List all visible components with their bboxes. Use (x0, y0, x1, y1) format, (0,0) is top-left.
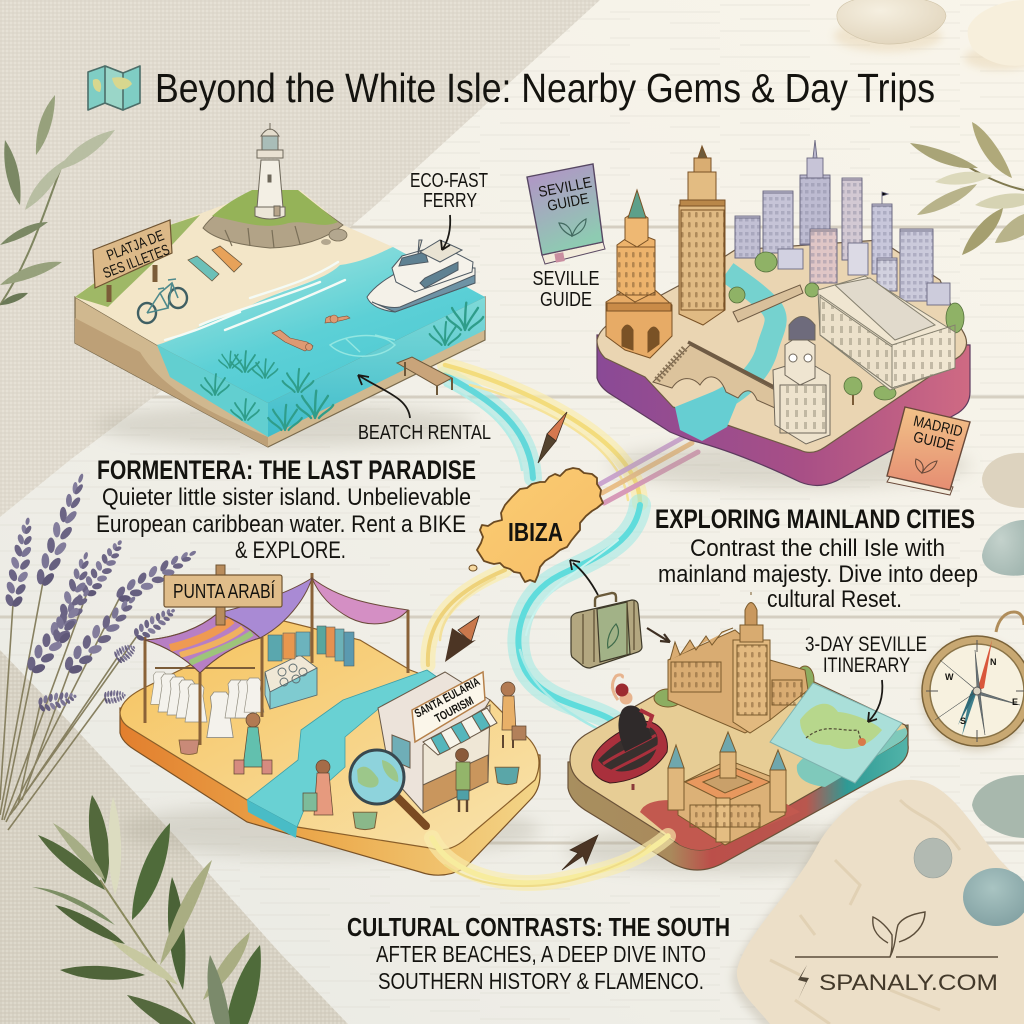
arrow: compass needle to market (445, 616, 479, 662)
Royal palace (818, 276, 955, 390)
arrow: ferry label (441, 215, 450, 250)
seaweed (201, 303, 483, 430)
beach loungers (188, 246, 242, 281)
text block: Formentera: Quieter little sister island. Unbelievable (102, 484, 471, 511)
yellow route market to south (432, 836, 668, 886)
label: 3-day Seville itinerary: ITINERARY (823, 654, 910, 677)
hanging coloured clothes (268, 626, 354, 666)
label: Seville guide (532, 267, 600, 311)
book: Seville guide: GUIDE (546, 190, 590, 215)
label: Seville guide: GUIDE (540, 288, 592, 311)
panel: Andalusian south block (565, 592, 908, 874)
pier (397, 357, 452, 395)
logo: sprout and rule (795, 912, 998, 957)
text block: the south: CULTURAL CONTRASTS: THE SOUTH (347, 912, 730, 942)
route: yellow ribbon Formentera to Ibiza and south (445, 365, 640, 503)
clock tower (773, 316, 830, 444)
label: IBIZA: IBIZA (508, 517, 563, 547)
linen cloth bottom-left (0, 650, 348, 1024)
compass: E (1012, 697, 1018, 707)
arrow: suitcase to the south (647, 628, 670, 642)
jewellery stall (265, 655, 317, 709)
sign: Platja de Ses Illetes: PLATJA DE (104, 227, 166, 264)
water top surface (157, 247, 485, 403)
bicycle (138, 279, 187, 323)
shop: Santa Eulària tourism (378, 672, 497, 813)
olive branch top-left (0, 95, 115, 305)
label: eco-fast ferry (410, 170, 488, 212)
magnifying glass over map (350, 750, 426, 826)
text block: mainland cities: cultural Reset. (767, 586, 902, 613)
market people (234, 682, 526, 815)
plinth top (120, 620, 539, 850)
water cross-section left (157, 345, 268, 437)
suitcase (571, 593, 642, 668)
book: Madrid guide: MADRID (912, 413, 964, 441)
shop: Santa Eulària tourism: SANTA EULARIA (412, 674, 482, 721)
compass: S (960, 716, 966, 726)
text block: the south: AFTER BEACHES, A DEEP DIVE INTO (376, 941, 706, 967)
water cross-section right (268, 297, 485, 437)
panel: Formentera island block (75, 123, 485, 447)
plinth side (568, 725, 908, 870)
alcazar fortress (668, 732, 786, 845)
book: Madrid guide (887, 407, 970, 495)
text block: Formentera: & EXPLORE. (235, 537, 346, 564)
map: Ibiza island (469, 468, 603, 582)
compass (921, 612, 1024, 751)
text block: mainland cities: mainland majesty. Dive into deep (658, 561, 978, 588)
arrow: itinerary label (868, 680, 882, 722)
clothes rack white dresses (151, 668, 264, 738)
panel: market and Santa Eulària block (120, 565, 540, 875)
plinth top (570, 680, 908, 850)
lighthouse (255, 123, 285, 219)
plinth side (597, 335, 970, 485)
sand and grass top (75, 190, 393, 345)
sign: Punta Arabí (164, 565, 282, 625)
route: teal ribbon Ibiza to the south (518, 505, 640, 730)
panel: mainland Seville and Madrid block (597, 140, 970, 489)
olive branch bottom-left (32, 795, 261, 1024)
compass: N (990, 657, 996, 667)
text block: Formentera: European caribbean water. Rent a BIKE (96, 511, 466, 538)
arrow: compass needle to south (562, 835, 598, 870)
plinth side (120, 708, 540, 875)
text block: Formentera (96, 455, 476, 564)
soil side (75, 297, 485, 447)
label: Seville guide: SEVILLE (532, 267, 600, 290)
text block: mainland cities (655, 504, 978, 613)
cathedral (654, 592, 814, 733)
unfolded map (770, 683, 902, 783)
compass: W (945, 672, 954, 682)
ferry (367, 240, 475, 312)
book: Seville guide (527, 164, 605, 264)
arrow: compass needle to Formentera (538, 412, 567, 463)
route: yellow ribbon Ibiza to market (428, 570, 505, 665)
Giralda tower (679, 146, 725, 325)
canopy posts (145, 573, 408, 745)
book: Madrid guide: GUIDE (912, 429, 956, 455)
book: Seville guide: SEVILLE (537, 174, 593, 201)
arrow: beach rental label (358, 375, 410, 418)
sign: Platja de Ses Illetes (93, 220, 172, 302)
logo: SPANALY.COM: SPANALY.COM (819, 970, 998, 995)
text block: the south (347, 912, 730, 994)
plinth top (597, 240, 967, 452)
Gothic tower left (606, 190, 672, 358)
skyline (735, 140, 950, 305)
small footbridge (733, 285, 803, 322)
red and teal ground (640, 800, 800, 850)
flamenco dancer (592, 675, 667, 790)
pebbles top and right (834, 0, 1024, 576)
sign: Punta Arabí: PUNTA ARABÍ (173, 580, 275, 603)
sign: Platja de Ses Illetes: SES ILLETES (101, 241, 172, 282)
lavender sprigs (0, 470, 201, 830)
route: rainbow ribbon Ibiza to mainland (600, 437, 698, 503)
swimmers (272, 315, 350, 351)
woven baskets (179, 740, 519, 830)
label: beach rental: BEATCH RENTAL (358, 421, 491, 444)
linen cloth top-left (0, 0, 600, 517)
colourful canopies (145, 578, 408, 673)
olive branch top-right (910, 122, 1024, 255)
logo: bolt icon (798, 965, 809, 1000)
limestone slab with logo (732, 775, 1024, 1024)
text block: mainland cities: Contrast the chill Isle with (690, 535, 945, 562)
map icon (88, 66, 140, 110)
shop sign (412, 672, 485, 742)
cliff and grass (203, 194, 343, 248)
river (710, 272, 776, 405)
shop: Santa Eulària tourism: TOURISM (432, 693, 476, 726)
arrow: suitcase to Ibiza (570, 560, 598, 595)
label: 3-day Seville itinerary (805, 633, 927, 677)
label: eco-fast ferry: ECO-FAST (410, 170, 488, 192)
stone bridge (653, 342, 776, 408)
route: teal ribbon Formentera to Ibiza (445, 375, 533, 478)
label: 3-day Seville itinerary: 3-DAY SEVILLE (805, 633, 927, 656)
label: eco-fast ferry: FERRY (423, 190, 477, 212)
trees (729, 252, 964, 405)
text block: the south: SOUTHERN HISTORY & FLAMENCO. (378, 968, 704, 994)
market stream (247, 670, 437, 827)
text block: Formentera: FORMENTERA: THE LAST PARADISE (97, 455, 476, 485)
awning (423, 708, 497, 755)
